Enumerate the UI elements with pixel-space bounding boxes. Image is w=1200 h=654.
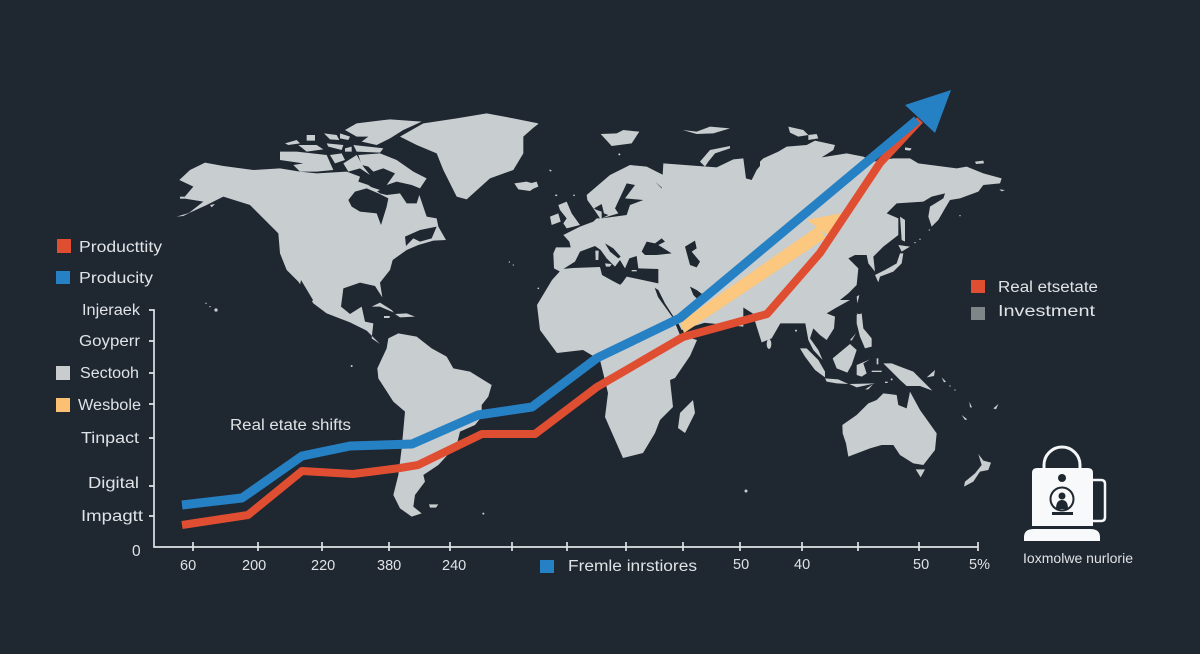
map: Mediterranean islands bbox=[595, 251, 637, 271]
y axis labels: Digital bbox=[88, 475, 139, 492]
x axis labels: 50 bbox=[733, 557, 749, 573]
x axis labels: 50 bbox=[913, 557, 929, 573]
map: North America bbox=[177, 163, 446, 367]
map: Arctic Canada bbox=[280, 119, 427, 192]
chart title: Real etate shifts bbox=[230, 417, 351, 434]
icon caption: Ioxmolwe nurlorie bbox=[1023, 551, 1133, 566]
map: European and Middle Eastern seas bbox=[562, 183, 703, 317]
map: eastern Asia bbox=[760, 127, 1005, 323]
map: Africa bbox=[537, 267, 697, 458]
x axis labels bbox=[180, 557, 990, 574]
icon: locked mug bbox=[1024, 447, 1105, 541]
x axis labels: 380 bbox=[377, 558, 401, 574]
y axis labels: Sectooh bbox=[80, 365, 139, 382]
right legend: Real etsetate bbox=[998, 279, 1098, 296]
y axis labels: 0 bbox=[132, 543, 141, 560]
x axis labels: 60 bbox=[180, 558, 196, 574]
axes and ticks bbox=[149, 310, 978, 551]
y axis labels bbox=[56, 302, 144, 560]
x axis labels: 220 bbox=[311, 558, 335, 574]
y axis labels: Injeraek bbox=[82, 302, 140, 319]
map: Hudson Bay and gulfs bbox=[348, 188, 437, 246]
x axis labels: 200 bbox=[242, 558, 266, 574]
world map bbox=[177, 113, 1005, 517]
red trend line bbox=[182, 120, 920, 525]
y axis labels: Tinpact bbox=[81, 430, 140, 447]
map: Europe and western Asia bbox=[530, 124, 743, 327]
x axis labels: 40 bbox=[794, 557, 810, 573]
x axis labels: 5% bbox=[969, 557, 990, 573]
map: central Asia, Arabia and India bbox=[657, 148, 813, 342]
map: Madagascar bbox=[678, 400, 695, 433]
map: Greenland and Iceland bbox=[400, 113, 557, 289]
y axis labels: Wesbole bbox=[78, 397, 141, 414]
y axis labels: Goyperr bbox=[79, 333, 140, 350]
right legend bbox=[971, 279, 1098, 320]
right legend: Investment bbox=[998, 303, 1096, 320]
map: South America bbox=[377, 333, 492, 517]
yellow trend arrow bbox=[680, 213, 842, 333]
bottom legend: Fremle inrstiores bbox=[568, 558, 697, 575]
map: Gulf of California bbox=[300, 280, 313, 303]
left legend: productivity: Producity bbox=[79, 270, 153, 287]
y axis labels: Impagtt bbox=[81, 508, 144, 525]
x axis labels: 240 bbox=[442, 558, 466, 574]
map: remote island dot bbox=[744, 490, 748, 492]
left legend: productivity: Producttity bbox=[79, 239, 162, 256]
map: South-East Asia and Oceania bbox=[767, 300, 998, 487]
blue trend arrow bbox=[182, 90, 951, 505]
left legend: productivity bbox=[56, 239, 162, 287]
